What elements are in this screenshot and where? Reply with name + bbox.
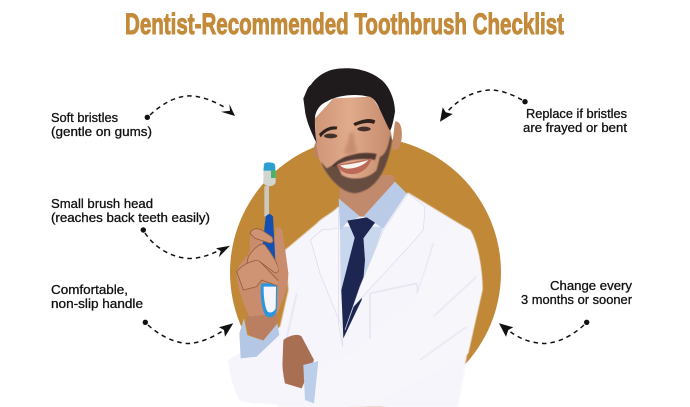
left ear	[314, 142, 320, 158]
wrist	[246, 310, 277, 341]
arrow: replace if frayed	[440, 90, 528, 122]
label: comfortable handle	[51, 282, 143, 311]
label: change every 3 months	[521, 278, 633, 307]
left cuff	[239, 318, 279, 358]
right ear	[392, 121, 402, 150]
fingers	[237, 229, 280, 290]
palm back	[237, 228, 288, 317]
face	[315, 97, 392, 193]
sleeve fold	[420, 277, 477, 360]
neck	[339, 175, 395, 217]
arrow: soft bristles	[145, 96, 235, 120]
label: small brush head	[51, 196, 210, 225]
toothbrush	[261, 162, 277, 317]
tie	[341, 217, 375, 338]
thumb overlap	[275, 228, 288, 293]
right cuff	[303, 361, 318, 403]
right sleeve	[315, 223, 482, 407]
arrow: small brush head	[141, 227, 230, 258]
mouth	[337, 158, 372, 174]
label: small brush head: (reaches back teeth easily)	[51, 210, 210, 225]
arrow: change every 3 months	[499, 320, 589, 344]
moustache	[332, 153, 377, 167]
label: comfortable handle: non-slip handle	[51, 296, 143, 311]
beard stubble	[321, 135, 392, 193]
label: comfortable handle: Comfortable,	[51, 282, 128, 297]
lapels	[311, 193, 425, 347]
label: soft bristles: Soft bristles	[51, 110, 118, 125]
coat shading	[283, 243, 480, 353]
shirt	[339, 182, 407, 337]
arrow: comfortable handle	[143, 320, 233, 344]
label: soft bristles	[51, 110, 152, 139]
label: replace if frayed: Replace if bristles	[526, 106, 627, 121]
crossed forearm	[282, 335, 314, 388]
label: soft bristles: (gentle on gums)	[51, 124, 152, 139]
label: small brush head: Small brush head	[51, 196, 153, 211]
nose shadow	[344, 132, 357, 155]
eyes and brows	[319, 119, 375, 138]
left sleeve	[228, 337, 283, 403]
label: replace if frayed: are frayed or bent	[523, 120, 627, 135]
lab coat body	[228, 193, 482, 407]
dentist figure	[228, 68, 482, 407]
label: change every 3 months: Change every	[550, 278, 632, 293]
background circle	[230, 137, 501, 407]
label: change every 3 months: 3 months or sooner	[521, 292, 633, 307]
label: replace if frayed	[523, 106, 627, 135]
hair	[303, 68, 395, 143]
